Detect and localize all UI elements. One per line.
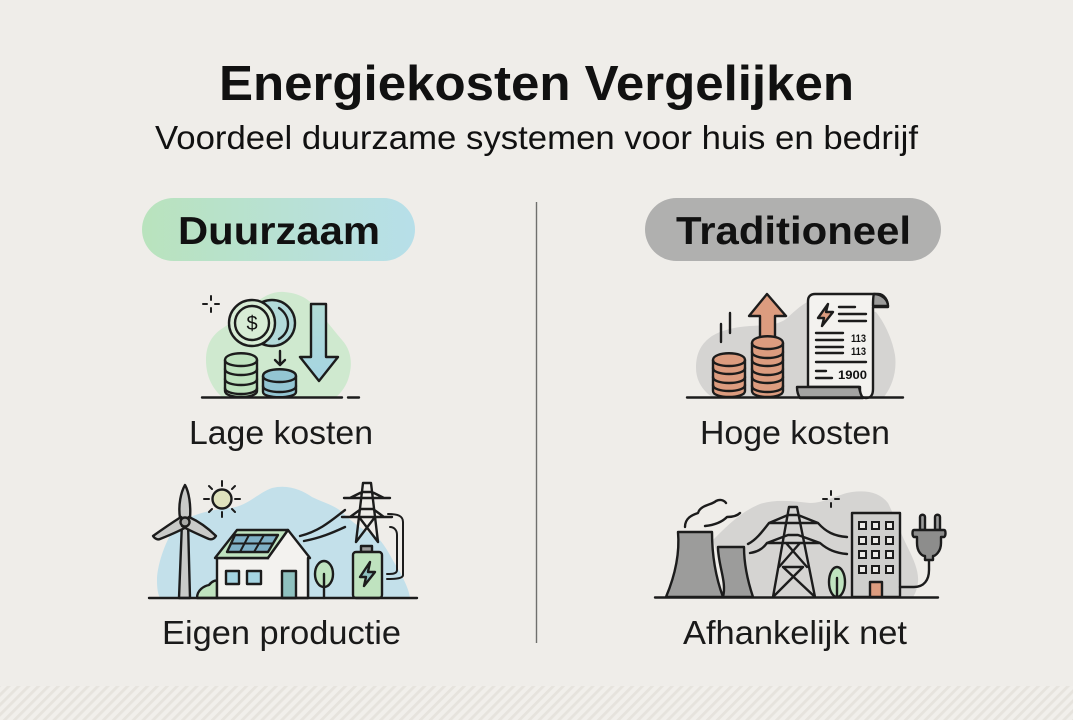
label: Lage kosten: Lage kosten (189, 414, 373, 451)
icon: own production house with wind, solar, battery (149, 481, 417, 598)
icon: high costs coins, up arrow and bill: 113 (851, 333, 866, 345)
icon: high costs coins, up arrow and bill (687, 294, 903, 398)
icon: high costs coins, up arrow and bill: 1900 (838, 370, 867, 382)
label: Hoge kosten: Hoge kosten (700, 414, 890, 451)
title: Energiekosten Vergelijken (219, 57, 854, 111)
subtitle: Voordeel duurzame systemen voor huis en bedrijf (155, 120, 919, 157)
panel: Duurzaam heading pill: Duurzaam (178, 210, 380, 253)
icon: low costs coins and down arrow (202, 292, 359, 398)
panel: Traditioneel heading pill: Traditioneel (676, 210, 911, 253)
panel: Traditioneel heading pill (645, 198, 941, 261)
icon: low costs coins and down arrow: $ (246, 313, 258, 335)
panel: Duurzaam heading pill (142, 198, 415, 261)
label: Eigen productie: Eigen productie (162, 614, 401, 651)
icon: dependent grid power plant, pylon, building, plug (655, 491, 946, 598)
label: Afhankelijk net: Afhankelijk net (683, 614, 907, 651)
icon: high costs coins, up arrow and bill: 113 (851, 346, 866, 358)
